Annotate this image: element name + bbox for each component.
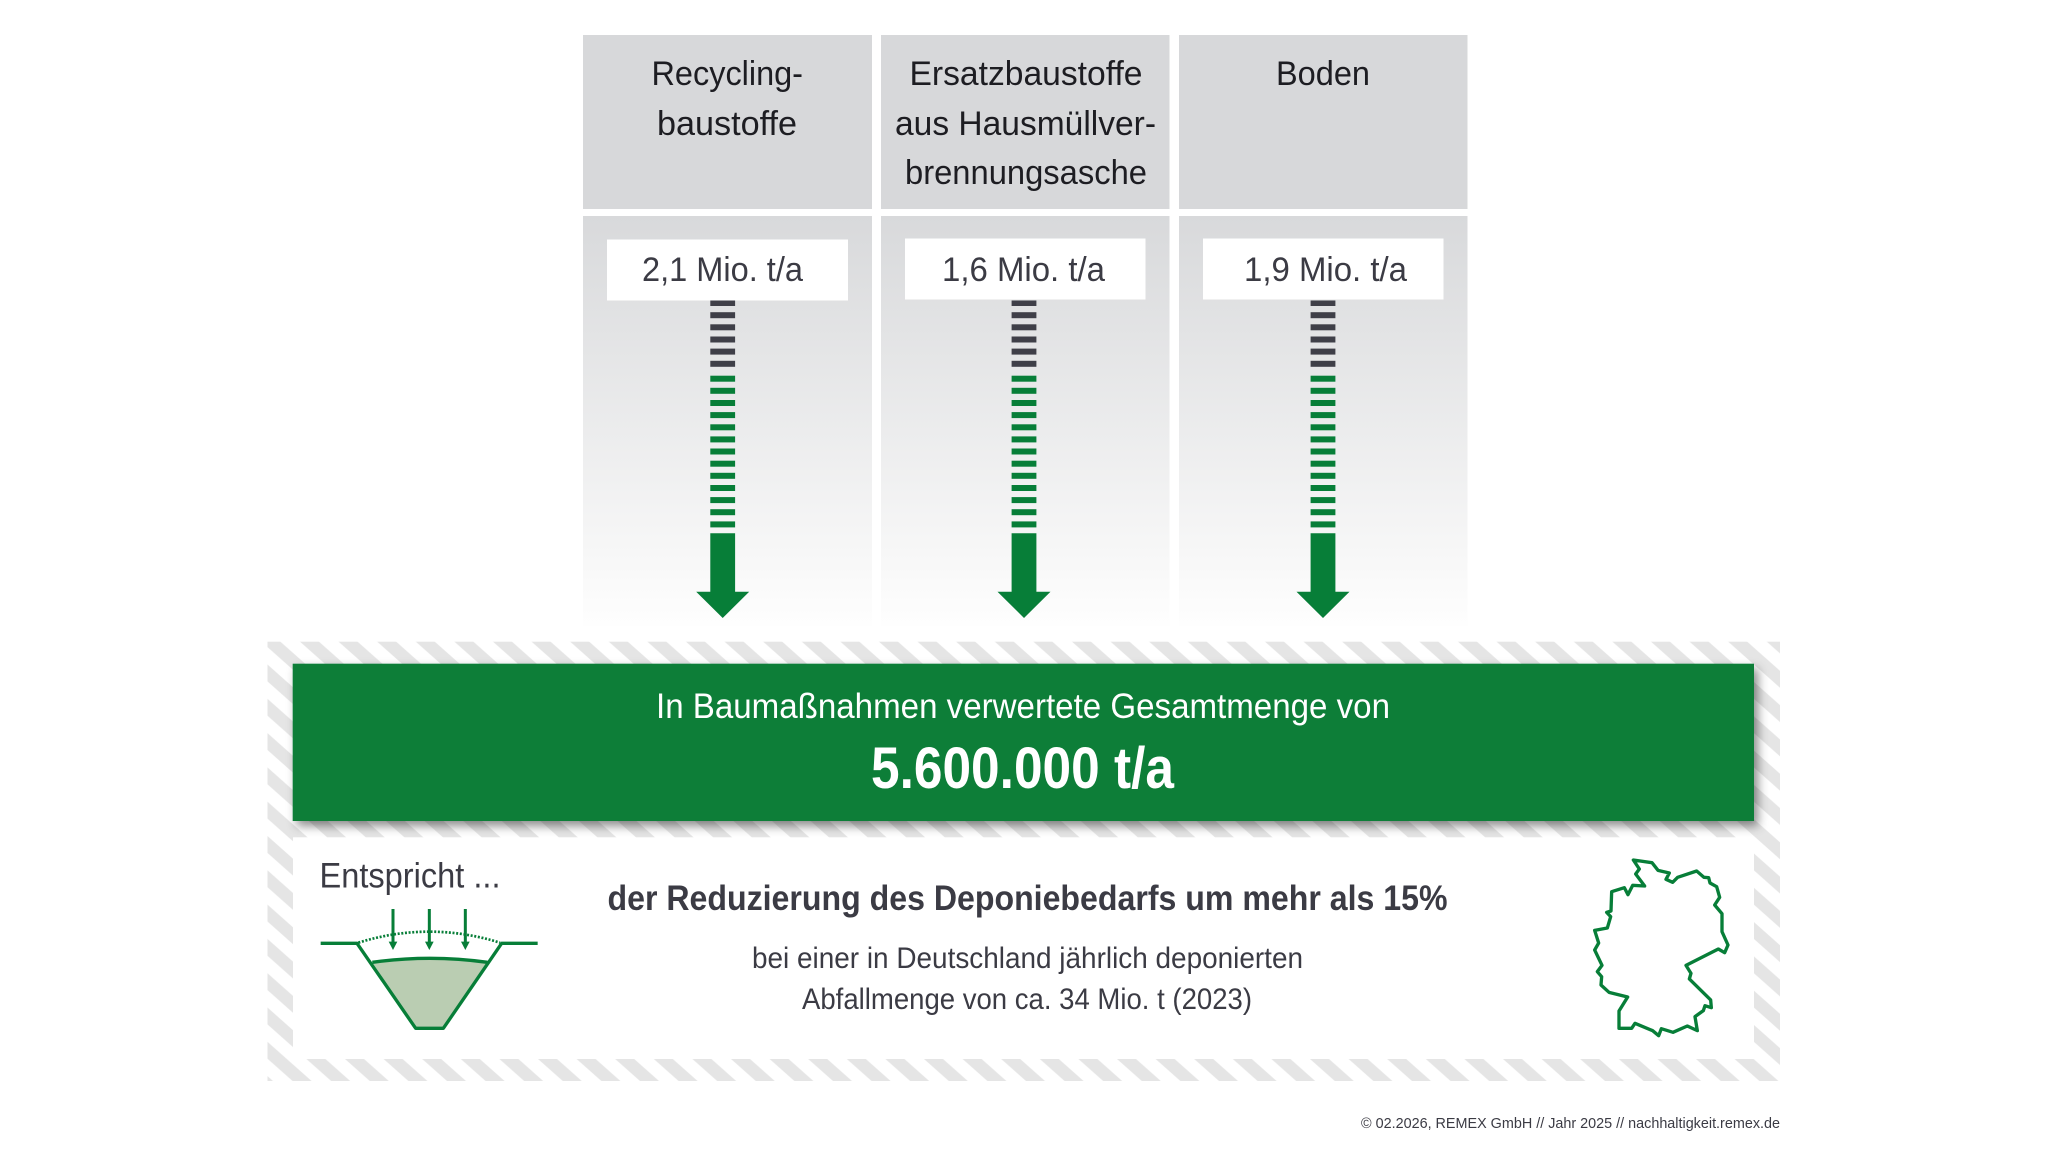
value label: 2,1 Mio. t/a: [607, 240, 848, 300]
icon: landfill with reduction arrows: [321, 909, 538, 1028]
header: Ersatzbaustoffe: aus Hausmüllver-: [895, 105, 1156, 143]
icon: map of Germany: [1595, 860, 1728, 1036]
text: Abfallmenge explanation: bei einer in Deutschland jährlich deponierten: [752, 942, 1303, 975]
panel: striped summary frame: [268, 642, 1780, 1081]
heading: Entspricht: Entspricht ...: [320, 857, 500, 896]
header: Ersatzbaustoffe: [881, 35, 1170, 209]
value label: 1,9 Mio. t/a: [1203, 238, 1444, 300]
panel: Boden quantity: [1179, 216, 1468, 626]
header: Boden: Boden: [1276, 55, 1370, 93]
banner: total amount: In Baumaßnahmen verwertete Gesamtmenge von: [656, 687, 1390, 726]
arrow: Ersatzbaustoffe: [998, 300, 1050, 618]
panel: Recyclingbaustoffe quantity: [583, 216, 872, 626]
value label: 1,6 Mio. t/a: [905, 238, 1146, 300]
value label: 2,1 Mio. t/a: 2,1 Mio. t/a: [642, 251, 803, 289]
text: Abfallmenge explanation: Abfallmenge von ca. 34 Mio. t (2023): [802, 983, 1252, 1016]
panel: column headers and flows: [583, 35, 1468, 626]
text: Reduzierung des Deponiebedarfs: der Reduzierung des Deponiebedarfs um mehr als 15%: [608, 879, 1448, 918]
banner: total amount: 5.600.000 t/a: [871, 736, 1175, 801]
header: Recyclingbaustoffe: Recycling-: [652, 55, 803, 93]
panel: Ersatzbaustoffe quantity: [881, 216, 1170, 626]
footer: copyright: © 02.2026, REMEX GmbH // Jahr 2025 // nachhaltigkeit.remex.de: [1361, 1115, 1780, 1132]
header: Recyclingbaustoffe: baustoffe: [657, 105, 797, 143]
arrow: Recyclingbaustoffe: [696, 300, 749, 618]
header: Ersatzbaustoffe: Ersatzbaustoffe: [910, 55, 1142, 93]
arrow: Boden: [1296, 300, 1350, 618]
header: Ersatzbaustoffe: brennungsasche: [905, 154, 1147, 192]
header: Recyclingbaustoffe: [583, 35, 872, 209]
header: Boden: [1179, 35, 1468, 209]
value label: 1,6 Mio. t/a: 1,6 Mio. t/a: [942, 251, 1105, 289]
banner: total amount: [293, 664, 1754, 821]
value label: 1,9 Mio. t/a: 1,9 Mio. t/a: [1244, 251, 1407, 289]
text: Abfallmenge explanation: [752, 942, 1303, 1016]
